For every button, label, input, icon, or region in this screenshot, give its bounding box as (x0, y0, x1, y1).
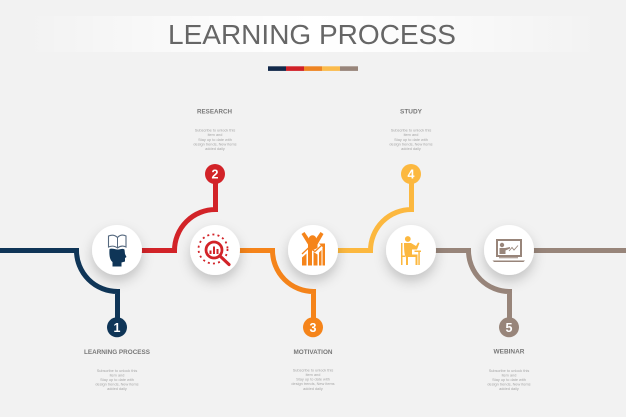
text block: step 4: design trends, New items (389, 142, 433, 146)
text block: step 4: Subscribe to unlock this (391, 129, 431, 133)
connector: step 5 (434, 250, 510, 325)
connector: step 1 (0, 250, 118, 325)
step 1 circle (92, 225, 142, 275)
text block: step 5: added daily (499, 387, 519, 391)
text block: step 3: Stay up to date with (296, 378, 330, 382)
text block: step 3: item and (306, 373, 320, 377)
badge 4 (401, 164, 421, 184)
icon: seated reader (401, 236, 421, 265)
text block: step 1: added daily (107, 387, 127, 391)
text block: step 3: Subscribe to unlock this (293, 368, 333, 372)
text block: step 2: Stay up to date with (198, 138, 232, 142)
heading: motivation: MOTIVATION (294, 349, 333, 356)
text block: step 2: design trends, New items (193, 142, 237, 146)
text block: step 1: Subscribe to unlock this (97, 369, 137, 373)
text block: step 2: added daily (205, 147, 225, 151)
step 3 circle (288, 225, 338, 275)
text block: step 1: design trends, New items (95, 383, 139, 387)
text block: step 1: Stay up to date with (100, 378, 134, 382)
badge 4: 4 (408, 168, 415, 182)
text block: step 1: item and (110, 373, 124, 377)
text block: step 2: item and (208, 133, 222, 137)
heading: webinar: WEBINAR (494, 349, 525, 356)
title band (25, 16, 601, 52)
badge 5: 5 (506, 321, 513, 335)
badge 2 (205, 164, 225, 184)
connector: step 2 (140, 176, 216, 250)
title: LEARNING PROCESS (168, 19, 456, 50)
heading: research: RESEARCH (197, 108, 232, 116)
text block: step 5: Stay up to date with (492, 378, 526, 382)
text block: step 3: added daily (303, 387, 323, 391)
heading: study: STUDY (400, 108, 423, 116)
badge 2: 2 (212, 168, 219, 182)
colour key bar (268, 66, 358, 71)
text block: step 5 (487, 369, 531, 391)
text block: step 4 (389, 129, 433, 151)
connector: exit line (530, 248, 626, 253)
text block: step 5: Subscribe to unlock this (489, 369, 529, 373)
connector: step 4 (336, 176, 412, 250)
badge 1: 1 (114, 321, 121, 335)
heading: learning process: LEARNING PROCESS (84, 349, 151, 356)
text block: step 1 (95, 369, 139, 391)
badge 3 (303, 317, 323, 337)
text block: step 4: item and (404, 133, 418, 137)
badge 5 (499, 317, 519, 337)
text block: step 4: Stay up to date with (394, 138, 428, 142)
text block: step 2: Subscribe to unlock this (195, 129, 235, 133)
step 5 circle (484, 225, 534, 275)
badge 1 (107, 317, 127, 337)
icon: person with rising chart (302, 232, 325, 266)
text block: step 3: design trends, New items (291, 382, 335, 386)
step 4 circle (386, 225, 436, 275)
icon: webinar laptop (492, 240, 525, 262)
step 2 circle (190, 225, 240, 275)
text block: step 2 (193, 129, 237, 151)
connector: step 3 (238, 250, 314, 325)
icon: magnifier with chart (198, 234, 229, 264)
text block: step 4: added daily (401, 147, 421, 151)
text block: step 5: design trends, New items (487, 383, 531, 387)
text block: step 5: item and (502, 373, 516, 377)
badge 3: 3 (310, 321, 317, 335)
icon: book and head (108, 235, 126, 266)
text block: step 3 (291, 368, 335, 391)
